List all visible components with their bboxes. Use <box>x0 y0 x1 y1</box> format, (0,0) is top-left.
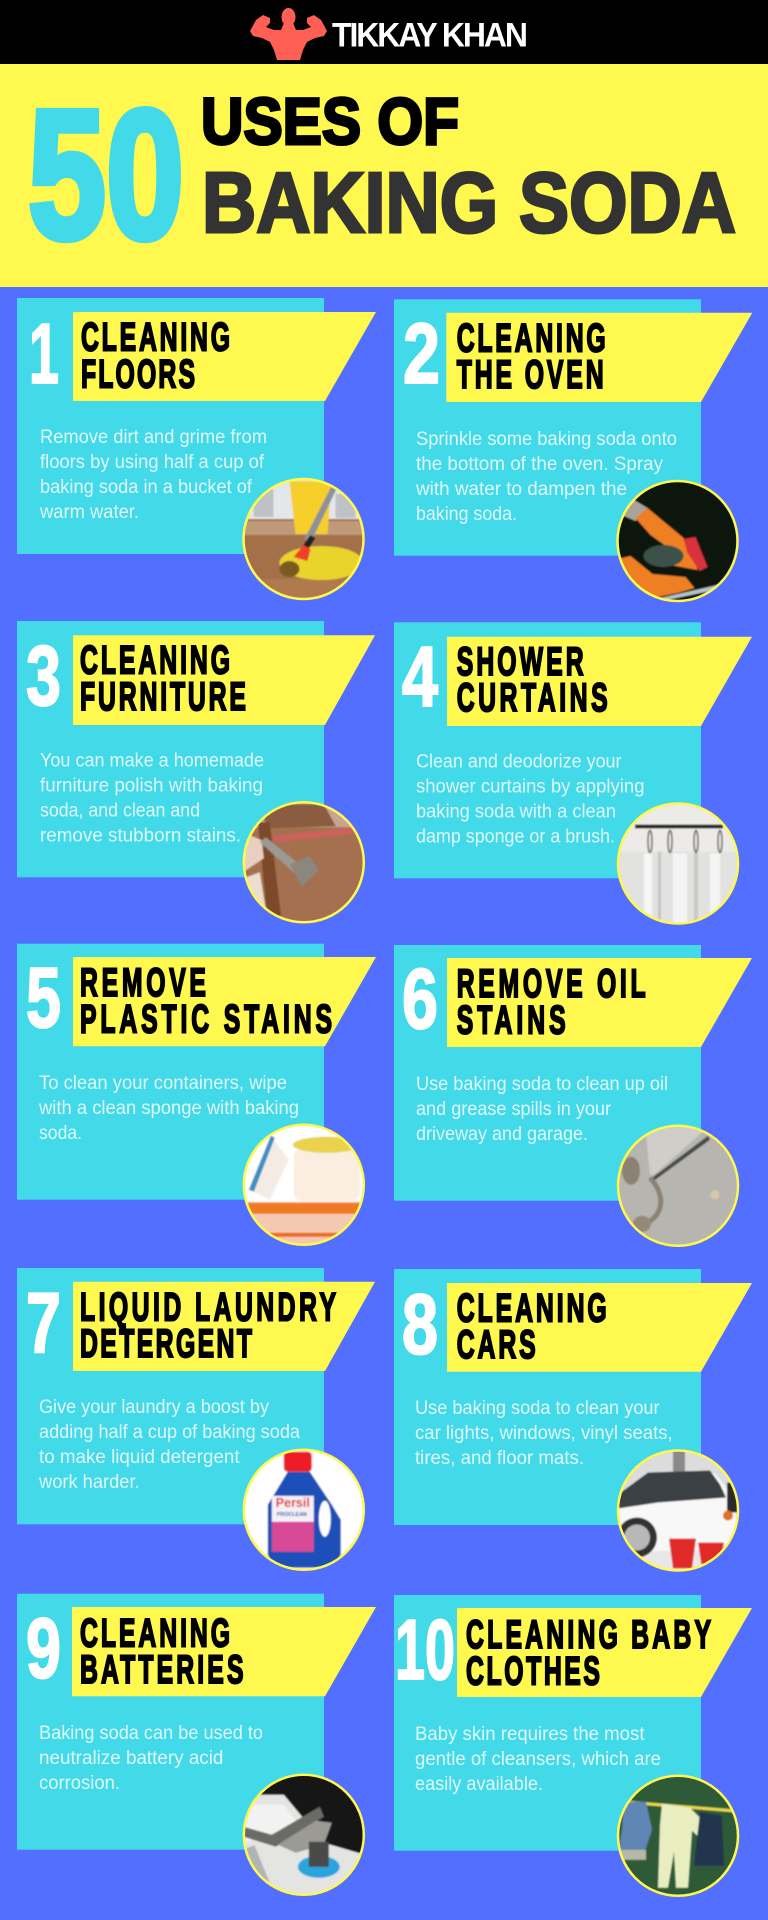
heading: CLEANING <box>457 1287 607 1331</box>
number: 8 <box>402 1278 438 1372</box>
heading: CLEANING <box>80 639 230 683</box>
image: clear shower curtain <box>617 802 739 924</box>
panel: 7 liquid laundry detergent <box>17 1268 375 1571</box>
image: detergent bottle: PROCLEAN <box>277 1512 307 1518</box>
body text: shower curtains by applying <box>416 776 644 798</box>
body text: the bottom of the oven. Spray <box>416 454 663 475</box>
heading: SHOWER <box>457 640 584 685</box>
body text: work harder. <box>38 1472 140 1493</box>
body text <box>38 1073 299 1144</box>
body text <box>39 427 267 523</box>
heading: FLOORS <box>81 352 195 397</box>
number: 2 <box>403 307 440 402</box>
panel: 8 cleaning cars <box>394 1269 752 1572</box>
image: baby clothes on a line <box>617 1775 739 1897</box>
body text: driveway and garage. <box>416 1124 588 1145</box>
heading banner <box>73 635 375 725</box>
body text: Give your laundry a boost by <box>39 1397 269 1418</box>
card background <box>394 622 701 878</box>
heading <box>80 1612 243 1693</box>
body text: with a clean sponge with baking <box>38 1098 299 1119</box>
body text: warm water. <box>39 502 139 523</box>
body text: baking soda. <box>416 504 517 525</box>
heading banner <box>457 1608 752 1697</box>
heading <box>457 1287 607 1368</box>
heading banner <box>72 1607 376 1696</box>
image: detergent bottle <box>243 1449 365 1571</box>
image: wire brush on battery terminal <box>238 1774 365 1896</box>
number: 4 <box>402 630 438 725</box>
heading <box>457 640 608 721</box>
body text: Use baking soda to clean your <box>415 1398 660 1419</box>
body text: damp sponge or a brush. <box>416 826 615 848</box>
heading: CLOTHES <box>466 1650 600 1694</box>
body text <box>415 1724 661 1795</box>
card background <box>17 298 324 554</box>
body text: baking soda with a clean <box>416 802 616 822</box>
number: 7 <box>26 1276 61 1371</box>
card background <box>394 945 701 1201</box>
heading: CLEANING <box>80 1612 230 1656</box>
body text: Baby skin requires the most <box>415 1724 645 1745</box>
heading: DETERGENT <box>80 1322 252 1367</box>
heading: FURNITURE <box>80 675 246 720</box>
heading banner <box>73 312 376 401</box>
image: stained shirt <box>617 1125 739 1247</box>
body text: gentle of cleansers, which are <box>415 1749 661 1770</box>
heading <box>80 639 246 720</box>
panel: 10 cleaning baby clothes <box>394 1595 752 1897</box>
body text <box>416 752 644 848</box>
body text: baking soda in a bucket of <box>40 477 253 498</box>
number: 1 <box>29 307 59 402</box>
body text: neutralize battery acid <box>39 1748 223 1769</box>
body text: Use baking soda to clean up oil <box>416 1074 668 1095</box>
body text: Sprinkle some baking soda onto <box>416 429 677 450</box>
body text: corrosion. <box>39 1773 120 1794</box>
image: cleaning upholstery <box>243 801 365 923</box>
image: mop on wooden floor <box>242 478 364 600</box>
image: white car and red buckets <box>617 1450 739 1572</box>
body text: and grease spills in your <box>416 1099 612 1120</box>
card background <box>17 621 324 877</box>
big number 50: 50 <box>28 71 184 277</box>
body text: Baking soda can be used to <box>39 1723 263 1744</box>
heading: CARS <box>457 1323 536 1368</box>
body text: You can make a homemade <box>40 750 264 772</box>
body text <box>39 1723 263 1794</box>
title line: uses of: USES OF <box>201 84 459 158</box>
body text: easily available. <box>415 1774 543 1795</box>
heading: LIQUID LAUNDRY <box>80 1286 336 1330</box>
heading: BATTERIES <box>80 1648 243 1693</box>
card background <box>394 1269 701 1525</box>
body text: floors by using half a cup of <box>40 452 265 473</box>
heading <box>466 1613 711 1694</box>
heading banner <box>446 313 752 402</box>
heading <box>80 961 332 1042</box>
body text <box>415 1398 673 1469</box>
brand name: TIKKAY KHAN <box>332 16 528 54</box>
heading: STAINS <box>457 999 566 1043</box>
number: 9 <box>26 1602 61 1696</box>
card background <box>17 944 324 1200</box>
image: plastic containers <box>243 1124 365 1246</box>
body text: Clean and deodorize your <box>416 752 622 772</box>
panel: 3 cleaning furniture <box>17 621 375 923</box>
heading: REMOVE <box>80 961 206 1006</box>
panel: 5 remove plastic stains <box>17 944 376 1246</box>
panel: 4 shower curtains <box>394 622 752 924</box>
heading <box>81 316 230 397</box>
panel: 1 cleaning floors <box>17 298 376 600</box>
heading <box>457 317 606 398</box>
number: 3 <box>26 629 61 724</box>
body text: tires, and floor mats. <box>415 1448 584 1469</box>
body text: car lights, windows, vinyl seats, <box>415 1423 673 1444</box>
image: gloves spraying oven <box>616 480 738 603</box>
number: 10 <box>395 1603 455 1698</box>
heading: CLEANING <box>81 316 230 360</box>
body text <box>415 429 677 525</box>
title banner <box>0 64 768 287</box>
body text: with water to dampen the <box>415 479 627 500</box>
heading: THE OVEN <box>457 353 604 398</box>
heading: PLASTIC STAINS <box>80 998 332 1042</box>
heading: CLEANING <box>457 317 606 361</box>
card background <box>394 1595 701 1851</box>
panel: 2 cleaning the oven <box>394 299 752 603</box>
body text: remove stubborn stains. <box>40 826 241 846</box>
heading banner <box>447 637 752 726</box>
body text: adding half a cup of baking soda <box>39 1422 300 1443</box>
body text: Remove dirt and grime from <box>40 427 267 448</box>
body text: soda. <box>39 1123 82 1144</box>
heading: CURTAINS <box>457 676 608 721</box>
body text <box>38 1397 300 1493</box>
body text: soda, and clean and <box>40 800 200 822</box>
body text <box>416 1074 668 1145</box>
number: 5 <box>26 951 61 1046</box>
body text: furniture polish with baking <box>40 776 263 796</box>
card background <box>17 1268 324 1524</box>
panel: 6 remove oil stains <box>394 945 752 1247</box>
body text <box>40 750 264 846</box>
card background <box>394 299 701 556</box>
number: 6 <box>402 952 438 1047</box>
heading banner <box>73 957 376 1046</box>
heading: REMOVE OIL <box>457 962 646 1007</box>
image: detergent bottle: Persil <box>276 1495 310 1510</box>
heading <box>80 1286 336 1367</box>
heading banner <box>447 1283 752 1372</box>
heading <box>457 962 646 1043</box>
top brand bar <box>0 0 768 64</box>
card background <box>17 1594 324 1850</box>
heading banner <box>447 958 752 1047</box>
panel: 9 cleaning batteries <box>17 1594 376 1896</box>
heading: CLEANING BABY <box>466 1613 711 1658</box>
icon: muscle man logo <box>250 8 327 60</box>
body text: To clean your containers, wipe <box>39 1073 287 1094</box>
body text: to make liquid detergent <box>39 1447 240 1468</box>
heading banner <box>73 1282 375 1371</box>
